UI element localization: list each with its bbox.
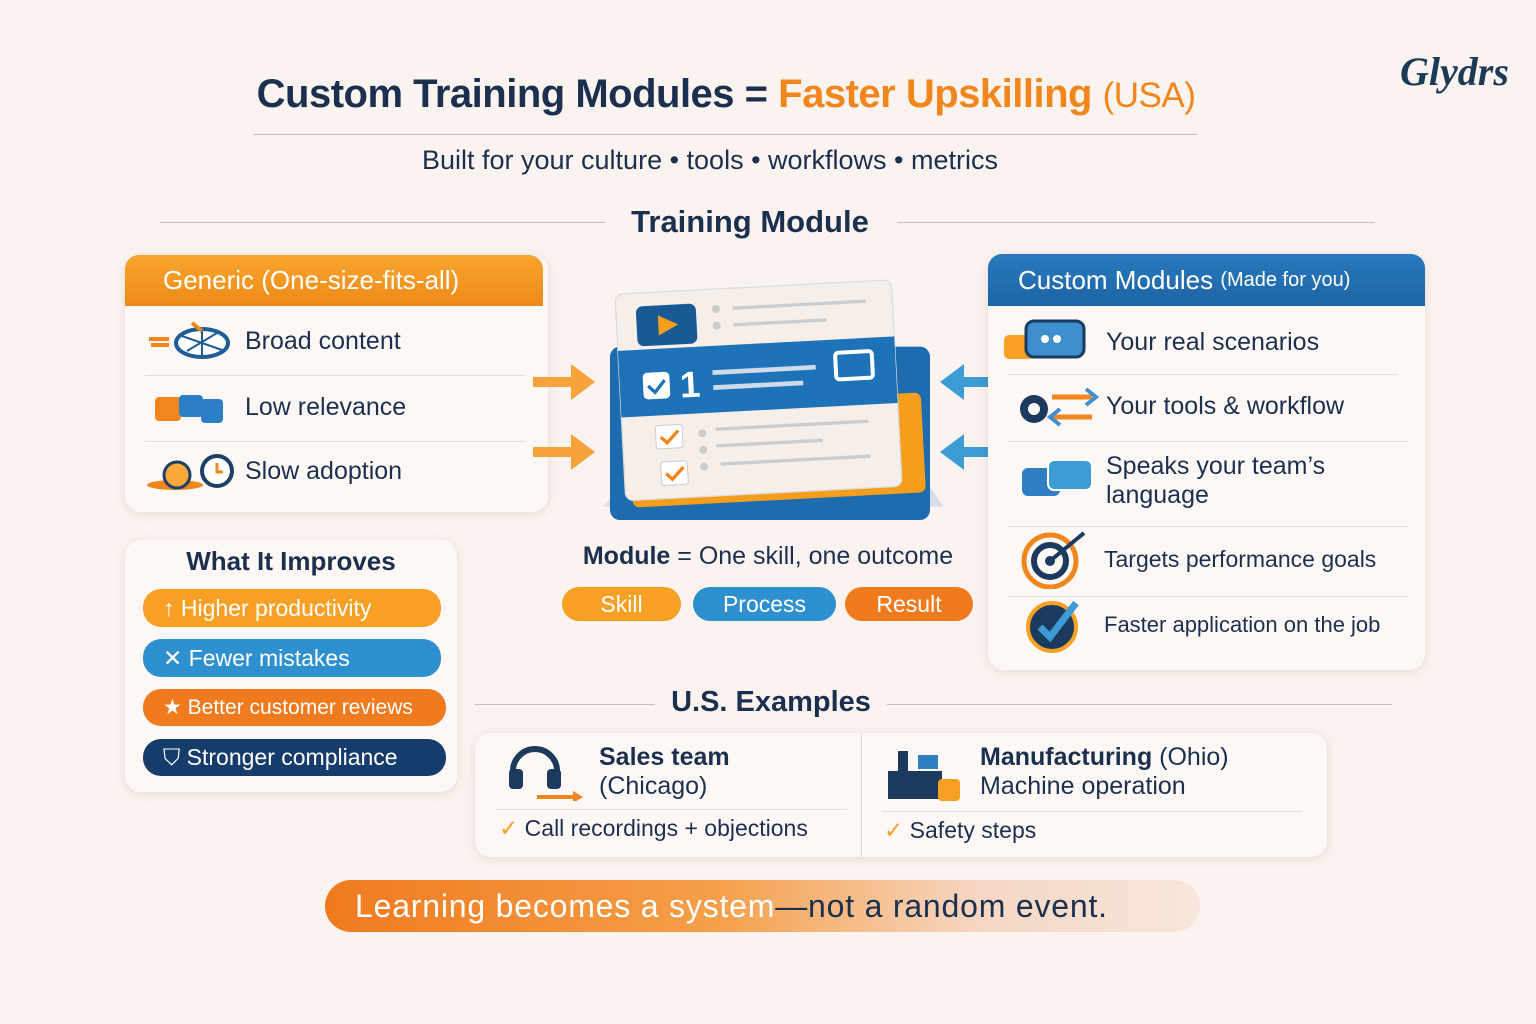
pill: skill [562, 587, 681, 621]
row: broad content [149, 322, 401, 359]
banner: Learning becomes a system [355, 888, 775, 924]
row: speaks language: Speaks your team’s [1106, 452, 1325, 480]
arrows: orange [533, 364, 595, 470]
pill: higher productivity [143, 589, 441, 627]
row: speaks language [1022, 452, 1325, 509]
panel: custom modules [988, 254, 1425, 670]
heading: US examples: U.S. Examples [671, 686, 871, 718]
example: manufacturing [882, 743, 1302, 843]
row: low relevance: Low relevance [245, 392, 406, 420]
banner [325, 880, 1200, 932]
heading: what it improves: What It Improves [186, 546, 396, 576]
row: low relevance [155, 392, 406, 423]
title: Custom Training Modules = Faster Upskilling (USA) [257, 72, 1195, 116]
example: sales team: (Chicago) [599, 772, 707, 800]
example: manufacturing: Machine operation [980, 772, 1186, 800]
row: faster application [1026, 600, 1380, 653]
example: manufacturing: ✓ Safety steps [884, 817, 1036, 843]
panel: examples [475, 733, 1327, 857]
row: slow adoption: Slow adoption [245, 456, 402, 484]
pill: stronger compliance: ⛉ Stronger compliance [163, 744, 398, 770]
row: real scenarios: Your real scenarios [1106, 328, 1319, 356]
pill: fewer mistakes [143, 639, 441, 677]
subtitle: Built for your culture • tools • workflows • metrics [422, 145, 998, 175]
row: tools & workflow: Your tools & workflow [1106, 392, 1344, 420]
example: sales team: ✓ Call recordings + objections [499, 815, 808, 841]
example: manufacturing: Manufacturing (Ohio) [980, 743, 1229, 771]
pill: fewer mistakes: ✕ Fewer mistakes [163, 644, 350, 670]
pill: result [845, 587, 973, 621]
pill: process: Process [723, 590, 806, 616]
pill: higher productivity: ↑ Higher productivity [163, 594, 371, 620]
row: performance goals [1022, 532, 1376, 589]
heading: training module: Training Module [631, 204, 869, 239]
pill: better reviews: ★ Better customer reviews [163, 696, 413, 719]
arrows: blue [940, 364, 988, 470]
header: custom modules: Custom Modules [1018, 264, 1213, 294]
pill: process [693, 587, 836, 621]
banner: —not a random event. [775, 888, 1108, 924]
row: faster application: Faster application on the job [1104, 612, 1380, 637]
pill: skill: Skill [600, 590, 643, 616]
header: custom modules [988, 254, 1425, 306]
pill: result: Result [876, 590, 942, 616]
module illustration [604, 280, 943, 520]
panel: what it improves [125, 540, 457, 792]
example: sales team: Sales team [599, 743, 730, 771]
header: custom modules: (Made for you) [1220, 268, 1350, 290]
logo: Glydrs [1400, 49, 1509, 94]
pill: stronger compliance [143, 739, 446, 776]
row: real scenarios [1004, 320, 1319, 359]
header: generic [125, 255, 543, 306]
pill: better reviews [143, 689, 446, 726]
row: broad content: Broad content [245, 326, 401, 354]
module illustration: 1 [679, 364, 701, 406]
row: tools & workflow [1020, 388, 1344, 426]
panel: generic [125, 255, 548, 512]
row: performance goals: Targets performance goals [1104, 546, 1376, 572]
module caption: Module = One skill, one outcome [583, 542, 953, 570]
row: slow adoption [147, 454, 402, 490]
header: generic: Generic (One-size-fits-all) [163, 265, 459, 295]
row: speaks language: language [1106, 481, 1209, 509]
example: sales team [495, 743, 847, 841]
